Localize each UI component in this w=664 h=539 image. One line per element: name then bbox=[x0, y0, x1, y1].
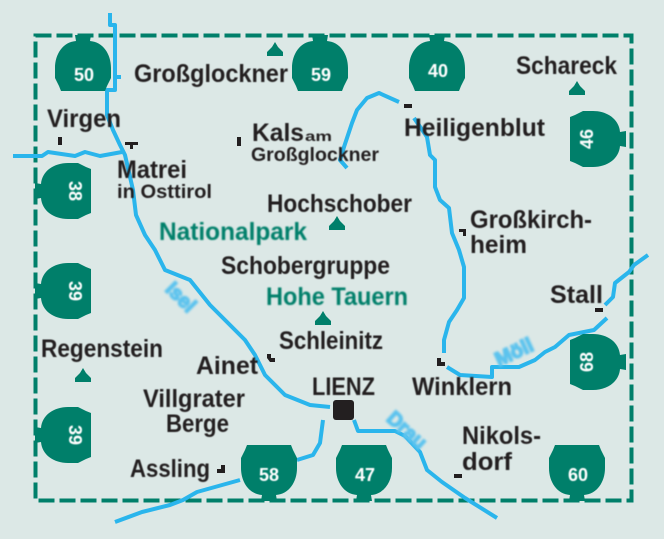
place labels: Großglockner bbox=[251, 145, 380, 166]
badge: map 59 bbox=[292, 35, 348, 91]
Lienz marker bbox=[333, 400, 354, 420]
place labels: am bbox=[305, 128, 332, 144]
badge: map 58 bbox=[241, 445, 297, 501]
river label: Isel: Isel bbox=[161, 278, 200, 317]
badge: map 39: 39 bbox=[65, 281, 85, 301]
badge: map 39 lower bbox=[35, 407, 91, 463]
badge: map 50: 50 bbox=[74, 65, 94, 85]
badge: map 40 bbox=[409, 35, 465, 91]
place labels: dorf bbox=[462, 448, 513, 476]
place labels: Nikols- bbox=[462, 422, 541, 450]
river label: Drau: Drau bbox=[382, 407, 431, 454]
map frame bbox=[36, 36, 632, 500]
badge: map 38: 38 bbox=[65, 181, 85, 201]
place labels: Regenstein bbox=[41, 335, 163, 363]
badge: map 68 bbox=[570, 334, 626, 390]
river label: Möll: Möll bbox=[492, 334, 537, 371]
badge: map 47: 47 bbox=[355, 465, 375, 485]
badge: map 39 bbox=[35, 263, 91, 319]
place labels: Hochschober bbox=[267, 190, 412, 218]
place labels bbox=[41, 52, 617, 483]
place labels: Stall bbox=[550, 281, 603, 309]
place labels: Winklern bbox=[412, 373, 512, 401]
badge: map 59: 59 bbox=[311, 65, 331, 85]
place labels: Villgrater bbox=[143, 385, 245, 413]
town markers bbox=[58, 104, 603, 478]
place labels: Heiligenblut bbox=[404, 114, 546, 142]
badge: map 47 bbox=[336, 445, 392, 501]
place labels: Schobergruppe bbox=[221, 252, 390, 280]
place labels: Virgen bbox=[47, 105, 121, 133]
badge: map 58: 58 bbox=[259, 465, 279, 485]
place labels: in Osttirol bbox=[117, 182, 212, 203]
badge: map 68: 68 bbox=[577, 352, 597, 372]
place labels: Großglockner bbox=[134, 60, 288, 88]
badge: map 46: 46 bbox=[577, 129, 597, 149]
place labels: Schareck bbox=[516, 52, 617, 80]
national park label: Hohe Tauern bbox=[266, 283, 408, 311]
badge: map 40: 40 bbox=[428, 61, 448, 81]
badge: map 38 bbox=[35, 163, 91, 219]
place labels: Assling bbox=[130, 455, 210, 483]
badge: map 60 bbox=[549, 445, 605, 501]
badge: map 50 bbox=[55, 35, 111, 91]
place labels: Großkirch- bbox=[470, 206, 592, 234]
place labels: Ainet bbox=[196, 352, 259, 380]
place labels: heim bbox=[470, 231, 527, 259]
national park label: Nationalpark bbox=[159, 218, 307, 246]
place labels: Schleinitz bbox=[279, 327, 383, 355]
place labels: LIENZ bbox=[312, 373, 375, 401]
place labels: Kals bbox=[252, 119, 304, 147]
badge: map 60: 60 bbox=[568, 465, 588, 485]
mountain icons bbox=[75, 42, 585, 382]
place labels: Berge bbox=[166, 410, 229, 438]
place labels: Matrei bbox=[117, 156, 187, 184]
badge: map 46 bbox=[570, 111, 626, 167]
badge: map 39 lower: 39 bbox=[65, 425, 85, 445]
national park label bbox=[159, 218, 408, 311]
